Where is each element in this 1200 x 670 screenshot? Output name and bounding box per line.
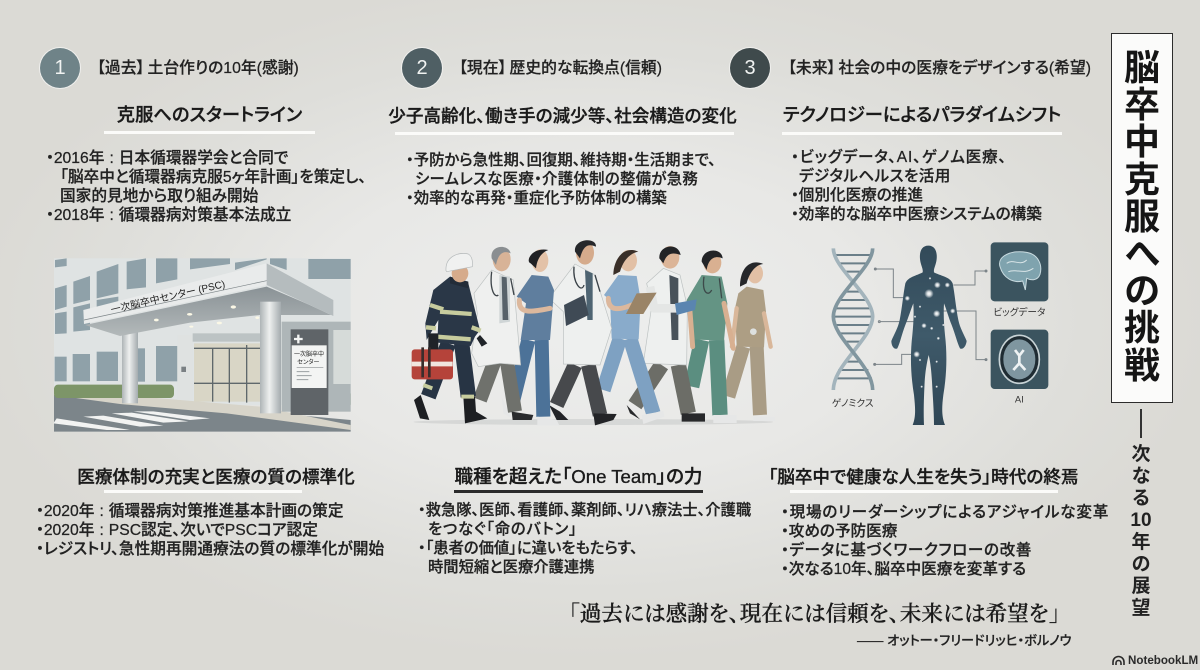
text block: 2020 milestones: ・レジストリ、急性期再開通療法の質の標準化が開始 xyxy=(36,541,384,558)
subheading: social structure change: 少子高齢化、働き手の減少等、社会構造の変化 xyxy=(388,106,737,126)
text block: 2016 and 2018 milestones: 「脳卒中と循環器病克服5ヶ年計画」を策定し、 xyxy=(60,169,366,186)
quote: 「過去には感謝を、現在には信頼を、未来には希望を」 xyxy=(569,602,1060,626)
text block: agile change: ・現場のリーダーシップによるアジャイルな変革 xyxy=(781,504,1109,521)
text block: baton of life: をつなぐ「命のバトン」 xyxy=(428,521,577,538)
text block: 2016 and 2018 milestones xyxy=(46,149,366,224)
underline: paradigm shift xyxy=(782,132,1062,135)
subheading: starting line: 克服へのスタートライン xyxy=(117,104,302,125)
illustration: primary stroke center building: センター xyxy=(297,358,319,366)
text block: technology: デジタルヘルスを活用 xyxy=(799,168,951,185)
text block: baton of life: ・「患者の価値」に違いをもたらす、 xyxy=(418,540,638,557)
text block: 2020 milestones xyxy=(36,502,384,558)
figure 1: firefighter with red bag xyxy=(412,253,487,423)
label: AI: AI xyxy=(1015,395,1024,405)
illustration: genomics, body, big data and AI xyxy=(832,242,1048,425)
text block: technology: ・個別化医療の推進 xyxy=(791,187,923,204)
text block: 2016 and 2018 milestones: ・2018年 : 循環器病対策基本法成立 xyxy=(46,207,291,224)
underline: One Team xyxy=(454,490,703,493)
figure 7: green nurse xyxy=(687,251,737,423)
text block: agile change: ・データに基づくワークフローの改善 xyxy=(781,542,1032,559)
text block: agile change: ・攻めの予防医療 xyxy=(781,523,897,540)
vertical subtitle: 10 xyxy=(1130,510,1152,531)
title box: 服 xyxy=(1124,196,1160,237)
figure 2: senior doctor xyxy=(472,247,533,420)
human body silhouette xyxy=(891,246,967,425)
vertical subtitle: 望 xyxy=(1131,598,1150,619)
underline: starting line xyxy=(104,131,315,134)
NotebookLM logo: NotebookLM xyxy=(1128,654,1198,667)
text block: seamless care: シームレスな医療・介護体制の整備が急務 xyxy=(415,171,698,188)
title box: 挑 xyxy=(1124,307,1160,348)
text block: 2016 and 2018 milestones: 国家的見地から取り組み開始 xyxy=(60,188,258,205)
text block: seamless care: ・効率的な再発・重症化予防体制の構築 xyxy=(406,190,667,207)
title box: 脳 xyxy=(1124,47,1160,88)
title box: 戦 xyxy=(1124,345,1160,386)
text block: technology: ・効率的な脳卒中医療システムの構築 xyxy=(791,206,1042,223)
illustration: primary stroke center building: 一次脳卒中 xyxy=(294,350,324,358)
step 1 number badge xyxy=(40,48,80,88)
figure 6: doctor with tablet xyxy=(627,246,705,422)
text block: baton of life: 時間短縮と医療介護連携 xyxy=(428,559,594,576)
connector lines xyxy=(874,268,987,365)
step 2 heading: 【現在】 歴史的な転換点(信頼) xyxy=(459,60,662,77)
figure 3: blue nurse xyxy=(502,249,559,425)
DNA helix xyxy=(833,248,873,390)
text block: 2020 milestones: ・2020年 : 循環器病対策推進基本計画の策定 xyxy=(36,503,344,520)
illustration: multidisciplinary team walking xyxy=(412,240,773,426)
text block: 2016 and 2018 milestones: ・2016年 : 日本循環器学会と合同で xyxy=(46,150,288,167)
figure 5: light blue nurse xyxy=(603,250,664,424)
subheading: One Team: 職種を超えた「One Team」の力 xyxy=(454,466,703,487)
step 3 number badge: 3 xyxy=(744,57,756,79)
step 2 number badge: 2 xyxy=(416,57,428,79)
underline: end of an era xyxy=(790,490,1058,493)
text block: agile change xyxy=(781,504,1109,578)
vertical subtitle: 展 xyxy=(1131,576,1150,597)
subheading: paradigm shift: テクノロジーによるパラダイムシフト xyxy=(783,104,1061,125)
illustration: primary stroke center building: 一次脳卒中センター (PSC) xyxy=(109,277,226,316)
vertical subtitle: の xyxy=(1132,554,1150,575)
title box: 卒 xyxy=(1124,84,1160,125)
subheading: medical system standardization: 医療体制の充実と医療の質の標準化 xyxy=(77,467,355,487)
subheading: end of an era: 「脳卒中で健康な人生を失う」時代の終焉 xyxy=(768,467,1079,487)
vertical subtitle: 年 xyxy=(1131,532,1150,553)
panel: AI brain scan xyxy=(991,330,1048,389)
step 2 number badge xyxy=(402,48,442,88)
text block: 2020 milestones: ・2020年 : PSC認定、次いでPSCコア認定 xyxy=(36,522,318,539)
step 1 number badge: 1 xyxy=(54,57,66,79)
vertical subtitle: な xyxy=(1132,466,1150,487)
text block: seamless care: ・予防から急性期、回復期、維持期・生活期まで、 xyxy=(406,152,716,169)
quote attribution: ―― オットー・フリードリッヒ・ボルノウ xyxy=(857,633,1071,648)
text block: baton of life xyxy=(418,502,751,576)
title box: 中 xyxy=(1124,121,1160,162)
figure 8: tan nurse xyxy=(728,262,775,421)
vertical subtitle xyxy=(1130,444,1152,619)
label: big data: ビッグデータ xyxy=(993,306,1046,318)
illustration: primary stroke center building xyxy=(54,258,351,432)
title box xyxy=(1111,33,1173,403)
vertical subtitle: 次 xyxy=(1131,444,1150,465)
text block: baton of life: ・救急隊、医師、看護師、薬剤師、リハ療法士、介護職 xyxy=(418,502,751,519)
figure 4: lead doctor xyxy=(549,240,617,425)
underline: social structure change xyxy=(395,132,734,135)
step 3 number badge xyxy=(730,48,770,88)
title box: の xyxy=(1124,270,1160,311)
title box: 克 xyxy=(1124,159,1160,200)
title box: へ xyxy=(1124,233,1160,274)
label: genomics: ゲノミクス xyxy=(832,397,874,409)
step 1 heading: 【過去】 土台作りの10年(感謝) xyxy=(97,60,299,77)
subtitle dash xyxy=(1140,409,1142,438)
text block: agile change: ・次なる10年、脳卒中医療を変革する xyxy=(781,561,1026,578)
step 3 heading: 【未来】 社会の中の医療をデザインする(希望) xyxy=(788,60,1091,77)
vertical subtitle: る xyxy=(1132,488,1150,509)
text block: technology: ・ビッグデータ、AI、ゲノム医療、 xyxy=(791,149,1007,166)
panel: big data brain xyxy=(991,242,1048,301)
underline: medical system standardization xyxy=(104,490,302,493)
text block: technology xyxy=(791,148,1042,223)
text block: seamless care xyxy=(406,152,716,207)
